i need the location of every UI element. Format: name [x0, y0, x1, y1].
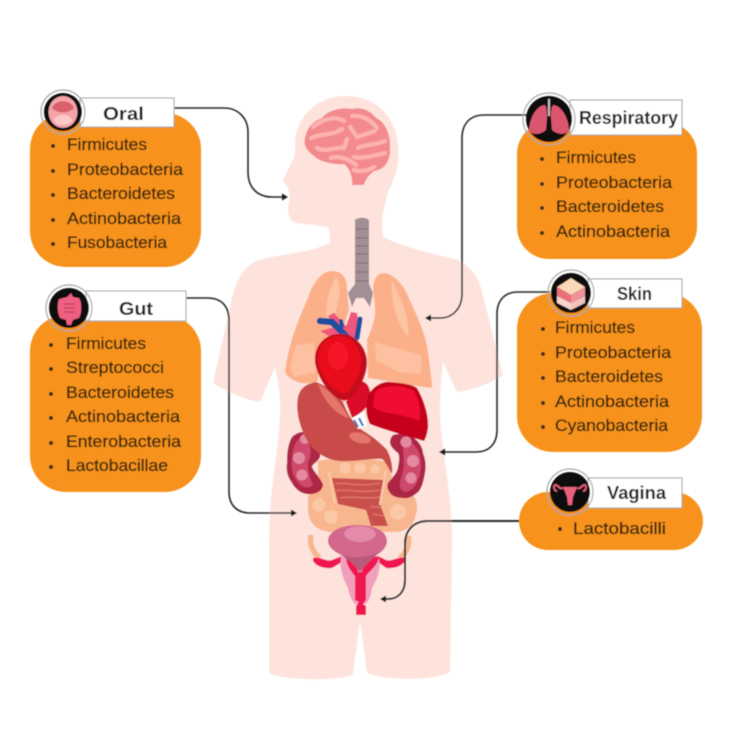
connector: gut to abdomen: [186, 298, 297, 516]
respiratory bacteria list: Firmicutes: [556, 149, 636, 167]
organ: stomach: [297, 382, 392, 474]
gut panel background: [30, 315, 201, 492]
organ: right lung: [367, 273, 432, 388]
respiratory bacteria list: Actinobacteria: [556, 223, 671, 241]
organ: heart and great vessels: [315, 312, 367, 401]
skin bacteria list: [541, 319, 672, 435]
gut bacteria list: Actinobacteria: [66, 408, 181, 426]
icon: uterus: [547, 469, 593, 515]
skin bacteria list: Proteobacteria: [555, 344, 672, 362]
organ: left kidney: [287, 432, 323, 494]
oral bacteria list: Fusobacteria: [67, 234, 168, 252]
gut label: Gut: [119, 298, 153, 319]
connector: skin to torso: [439, 292, 550, 456]
gut bacteria list: Streptococci: [66, 359, 164, 377]
vagina panel background: [519, 492, 703, 550]
panel: vagina: [519, 469, 703, 550]
icon: skin layers: [548, 270, 594, 316]
skin label: Skin: [617, 283, 652, 304]
organ: large intestine: [308, 458, 417, 532]
human body silhouette: [213, 96, 503, 679]
oral bacteria list: Firmicutes: [67, 136, 147, 154]
vagina label: Vagina: [607, 482, 667, 503]
oral label: Oral: [103, 103, 144, 124]
organ: right kidney: [387, 434, 426, 498]
icon: mouth: [41, 90, 85, 134]
organ: trachea: [348, 218, 373, 307]
vagina label: [588, 478, 682, 508]
skin bacteria list: Bacteroidetes: [555, 368, 663, 386]
respiratory panel background: [517, 122, 697, 259]
panel: skin: [517, 270, 702, 452]
respiratory bacteria list: Proteobacteria: [556, 174, 673, 192]
organ: bladder and reproductive tract: [311, 525, 409, 615]
skin bacteria list: Firmicutes: [555, 319, 635, 337]
organ: brain: [305, 108, 390, 185]
gut bacteria list: Firmicutes: [66, 335, 146, 353]
gut bacteria list: Lactobacillae: [66, 457, 168, 475]
skin bacteria list: Cyanobacteria: [555, 417, 669, 435]
gut bacteria list: Enterobacteria: [66, 433, 182, 451]
gut label: [86, 291, 186, 321]
organ: left lung: [285, 271, 349, 383]
oral panel background: [30, 113, 201, 267]
respiratory label: Respiratory: [579, 107, 679, 128]
oral bacteria list: Bacteroidetes: [67, 185, 175, 203]
oral label: [80, 98, 174, 127]
icon: lungs: [523, 93, 575, 145]
oral bacteria list: [51, 136, 184, 252]
connector: vagina to pelvis: [380, 521, 521, 602]
connector: respiratory to chest: [425, 115, 527, 322]
icon: intestines: [46, 285, 92, 331]
respiratory label: [570, 100, 682, 135]
organ: small red organ with vessels: [346, 381, 370, 429]
organ: liver: [366, 382, 428, 441]
oral bacteria list: Actinobacteria: [67, 210, 182, 228]
organ: small intestine: [329, 470, 388, 526]
vagina bacteria list: Lactobacilli: [573, 520, 666, 538]
oral bacteria list: Proteobacteria: [67, 161, 184, 179]
connector: oral to mouth: [174, 108, 288, 200]
respiratory bacteria list: Bacteroidetes: [556, 198, 664, 216]
skin label: [588, 279, 682, 308]
panel: gut: [30, 285, 201, 492]
respiratory bacteria list: [540, 149, 673, 241]
panel: oral: [30, 90, 201, 267]
panel: respiratory: [517, 93, 697, 259]
skin panel background: [517, 293, 702, 452]
skin bacteria list: Actinobacteria: [555, 393, 670, 411]
gut bacteria list: Bacteroidetes: [66, 384, 174, 402]
gut bacteria list: [49, 335, 182, 475]
